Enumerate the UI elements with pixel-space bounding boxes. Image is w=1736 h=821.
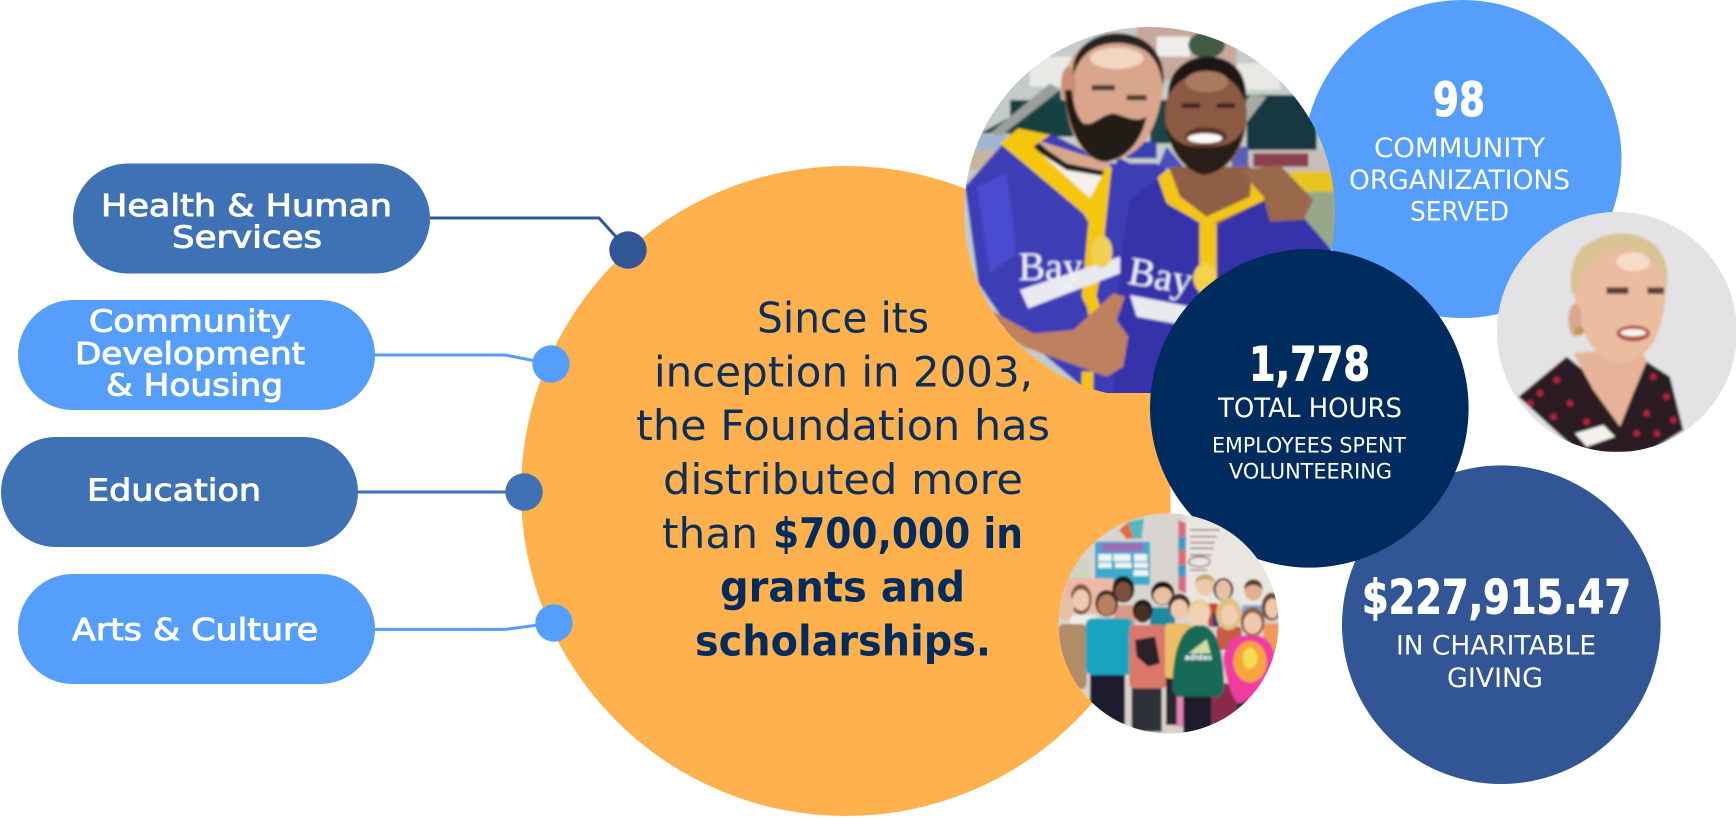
photo: two men in jerseys	[964, 27, 1335, 393]
main statement text: than	[662, 509, 758, 558]
pill: Health & Human Services: Services	[172, 220, 322, 256]
main statement text: grants and	[720, 563, 965, 612]
stat circle: 227,915.47 in charitable giving: $227,915.47	[1362, 571, 1631, 626]
main statement text	[636, 294, 1050, 666]
jersey text	[1020, 257, 1120, 308]
connector: Education	[357, 473, 543, 511]
man 1 arm and thumb	[990, 293, 1128, 377]
man 1 head	[1065, 35, 1163, 162]
pill: Community Development & Housing: Development	[75, 337, 305, 372]
connector: Health & Human Services	[430, 218, 647, 269]
main statement text: distributed more	[663, 455, 1023, 504]
main statement text: the Foundation has	[636, 401, 1050, 450]
central orange circle	[521, 166, 1171, 816]
pill: Arts & Culture: Arts & Culture	[72, 613, 318, 648]
pill: Community Development & Housing	[18, 300, 375, 410]
photo: two men in jerseys: Bay	[1125, 248, 1196, 303]
photo: group of schoolchildren	[1058, 514, 1278, 734]
stat circle: 98 community organizations	[1304, 0, 1622, 318]
man 2 arm	[1240, 165, 1313, 222]
photo: group of schoolchildren: adidas	[1185, 652, 1212, 662]
main statement text: scholarships.	[695, 617, 991, 666]
connector: Community Development & Housing	[374, 345, 570, 383]
stat circle: 1,778 total hours: EMPLOYEES SPENT	[1212, 434, 1407, 459]
stat circle: 1,778 total hours	[1150, 249, 1469, 568]
pill: Community Development & Housing: & Housing	[106, 369, 283, 404]
pill: Health & Human Services	[73, 164, 430, 274]
pill: Education	[1, 437, 358, 547]
stat circle: 1,778 total hours: TOTAL HOURS	[1217, 393, 1402, 424]
pill: Health & Human Services: Health & Human	[101, 189, 392, 224]
stat circle: 98 community organizations: 98	[1433, 73, 1485, 128]
stat circle: 98 community organizations: ORGANIZATIONS	[1349, 165, 1570, 196]
stat circle: 1,778 total hours: VOLUNTEERING	[1229, 460, 1392, 485]
main statement text: inception in 2003,	[654, 348, 1033, 397]
stat circle: 98 community organizations: COMMUNITY	[1374, 133, 1546, 164]
main statement text: $700,000 in	[773, 509, 1023, 558]
connector: Arts & Culture	[374, 604, 573, 642]
stat circle: 98 community organizations: SERVED	[1410, 196, 1509, 228]
man 2 body	[1110, 175, 1333, 400]
stat circle: 227,915.47 in charitable giving: GIVING	[1447, 663, 1543, 694]
pill: Education: Education	[87, 474, 261, 509]
main statement text: Since its	[757, 294, 929, 343]
man 1 body	[965, 133, 1167, 397]
back row	[1195, 574, 1215, 596]
photo: smiling woman	[1493, 207, 1736, 457]
stat circle: 227,915.47 in charitable giving	[1342, 465, 1661, 784]
photo: two men in jerseys: Bay	[1018, 244, 1083, 289]
pill: Arts & Culture	[18, 574, 375, 684]
stat circle: 227,915.47 in charitable giving: IN CHARITABLE	[1396, 630, 1596, 661]
front row	[1058, 624, 1087, 689]
man 2 head	[1163, 76, 1248, 168]
stat circle: 1,778 total hours: 1,778	[1249, 338, 1370, 393]
pill: Community Development & Housing: Community	[89, 304, 291, 340]
